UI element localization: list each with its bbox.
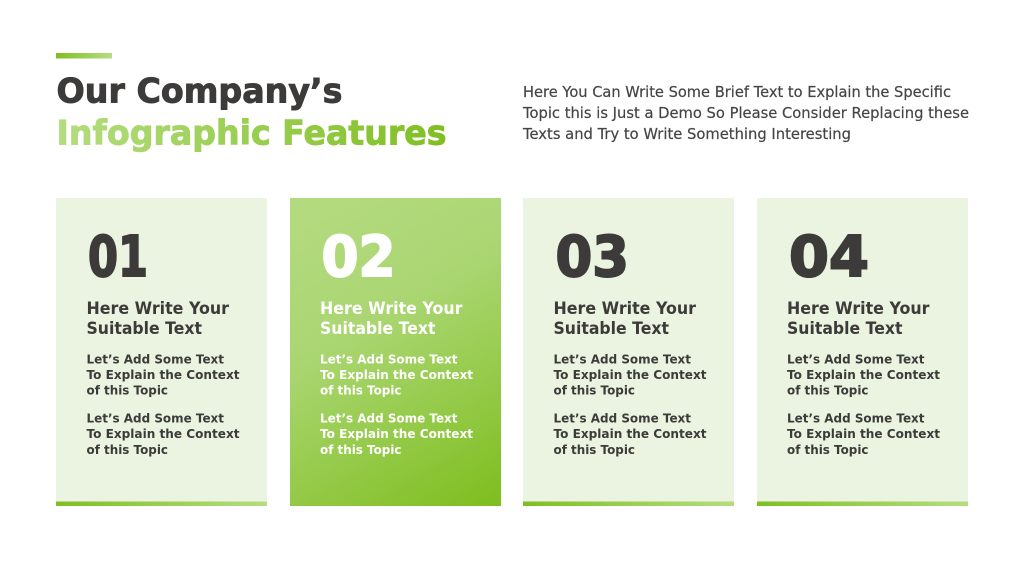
intro text: Texts and Try to Write Something Interesting [522, 125, 851, 143]
card body text [86, 352, 240, 457]
panel: card 04 [757, 198, 968, 506]
card heading: Suitable Text [320, 319, 436, 339]
card heading: Here Write Your [86, 299, 230, 319]
card body text: To Explain the Context [86, 426, 240, 441]
card body text: of this Topic [320, 382, 402, 398]
card body text: Let’s Add Some Text [787, 410, 924, 426]
number 04: 04 [789, 225, 869, 290]
panel: card 01 [56, 198, 267, 506]
card body text [787, 352, 940, 457]
intro text: Topic this is Just a Demo So Please Consider Replacing these [522, 104, 969, 122]
card body text: of this Topic [554, 442, 635, 457]
panel: card 03 [523, 198, 734, 506]
card body text: Let’s Add Some Text [86, 410, 224, 426]
card body text [320, 352, 473, 457]
panel: card 02 [290, 198, 501, 506]
card body text: Let’s Add Some Text [554, 410, 691, 426]
card body text: of this Topic [86, 382, 168, 398]
number 03: 03 [556, 225, 629, 290]
number 02: 02 [322, 225, 396, 290]
card body text: To Explain the Context [86, 367, 240, 382]
card body text: Let’s Add Some Text [86, 352, 224, 366]
card body text: of this Topic [554, 382, 635, 398]
card body text: To Explain the Context [320, 426, 473, 441]
card body text: of this Topic [86, 442, 168, 457]
card body text: of this Topic [787, 442, 868, 457]
card heading: Here Write Your [320, 299, 463, 319]
card heading [554, 299, 697, 339]
card body text: To Explain the Context [787, 367, 940, 382]
card heading [320, 299, 463, 339]
card body text: Let’s Add Some Text [320, 410, 458, 426]
card body text: Let’s Add Some Text [554, 352, 691, 366]
card body text: of this Topic [787, 382, 868, 398]
card body text [554, 352, 706, 457]
card heading: Suitable Text [554, 319, 669, 339]
card body text: To Explain the Context [320, 367, 473, 382]
card heading: Here Write Your [554, 299, 697, 319]
card body text: Let’s Add Some Text [787, 352, 924, 366]
card body text: To Explain the Context [787, 426, 940, 441]
intro text: Here You Can Write Some Brief Text to Explain the Specific [523, 83, 951, 101]
title: Infographic Features [56, 114, 446, 152]
card heading: Suitable Text [787, 319, 902, 339]
intro text [522, 83, 969, 143]
number 01: 01 [88, 225, 148, 290]
title: Our Company’s [56, 72, 342, 110]
accent bar [56, 53, 112, 58]
card heading [787, 299, 930, 339]
card heading [86, 299, 230, 339]
card heading: Suitable Text [86, 319, 202, 339]
card body text: Let’s Add Some Text [320, 352, 458, 366]
card body text: of this Topic [320, 442, 402, 457]
card body text: To Explain the Context [554, 367, 706, 382]
card body text: To Explain the Context [554, 426, 706, 441]
card heading: Here Write Your [787, 299, 930, 319]
title [56, 72, 446, 152]
